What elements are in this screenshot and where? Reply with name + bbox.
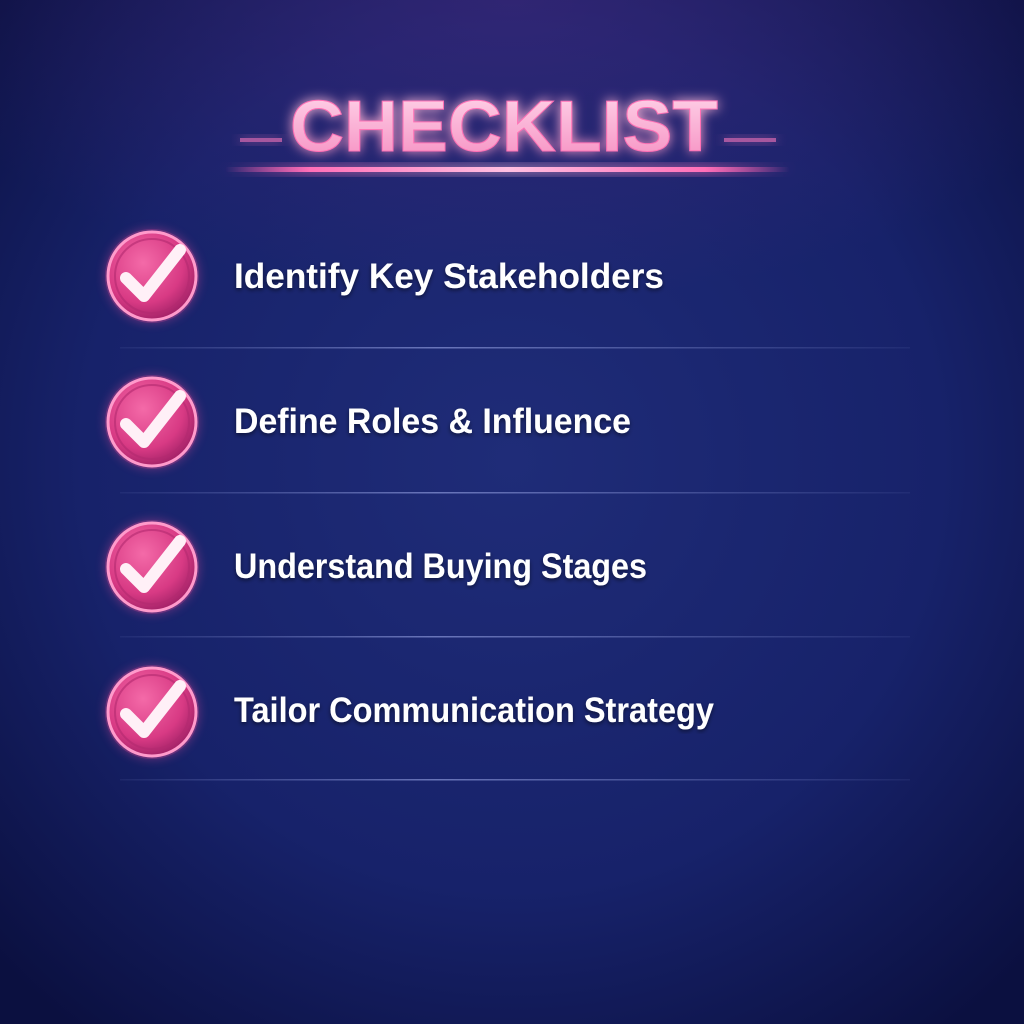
icon: check 1	[105, 229, 199, 323]
item 2: Define Roles & Influence	[234, 402, 631, 441]
item 4: Tailor Communication Strategy	[234, 691, 714, 730]
icon: check 2	[105, 375, 199, 469]
item 1	[105, 229, 664, 323]
item 2	[105, 375, 631, 469]
item 1: Identify Key Stakeholders	[234, 257, 664, 296]
title	[225, 87, 790, 172]
item 3: Understand Buying Stages	[234, 547, 647, 586]
title: CHECKLIST	[290, 87, 718, 167]
icon: check 3	[105, 520, 199, 614]
item 3	[105, 520, 647, 614]
icon: check 4	[105, 665, 199, 759]
item 4	[105, 665, 714, 759]
